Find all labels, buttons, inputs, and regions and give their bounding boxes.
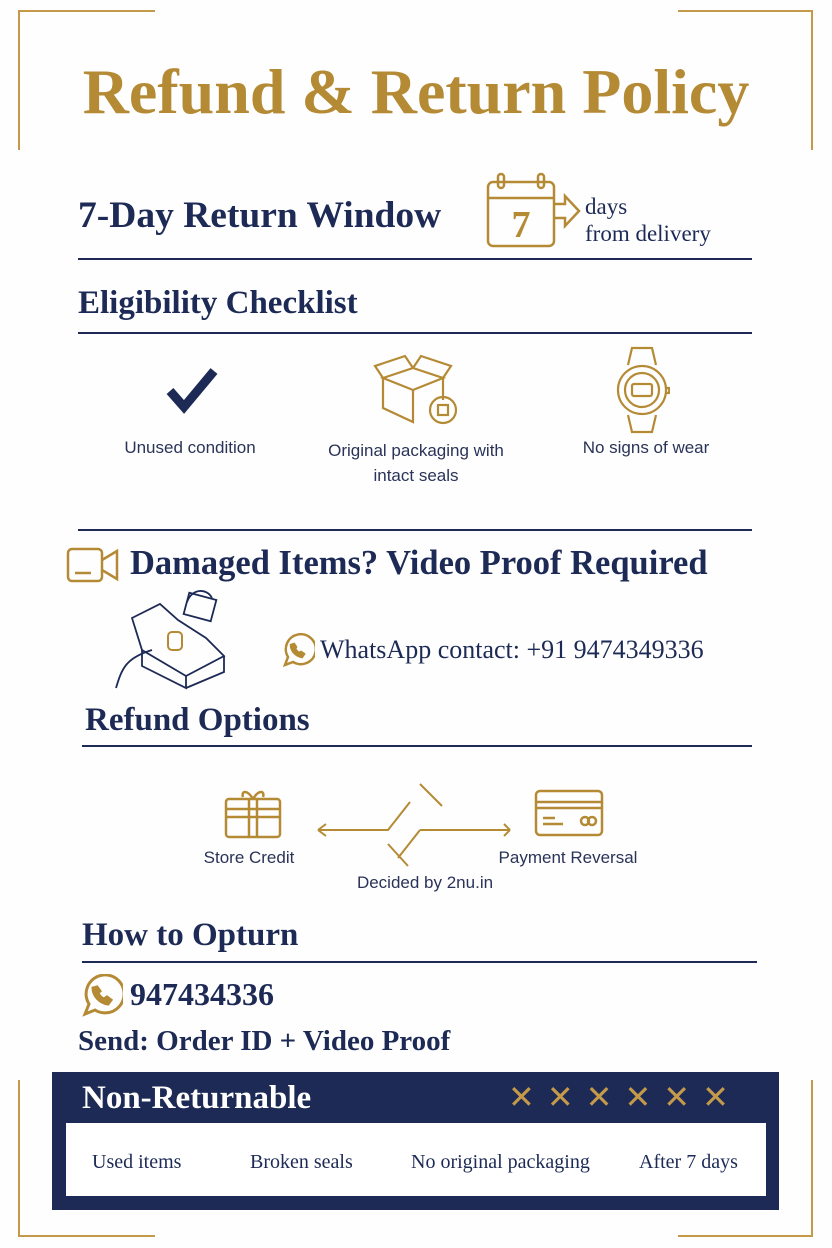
heading: eligibility: Eligibility Checklist (78, 285, 358, 321)
heading: damaged: Damaged Items? Video Proof Required (130, 544, 708, 582)
list box (66, 1123, 766, 1196)
text: send: Send: Order ID + Video Proof (78, 1025, 450, 1057)
icon: video (66, 548, 118, 582)
panel: non-returnable (52, 1072, 779, 1210)
icon: calendar: 7 (512, 204, 530, 246)
text: days from delivery (585, 194, 711, 246)
heading: refund options: Refund Options (85, 702, 310, 738)
list box: Broken seals (250, 1151, 353, 1173)
text: whatsapp contact: WhatsApp contact: +91 9474349336 (320, 635, 704, 664)
label: store credit: Store Credit (204, 848, 294, 867)
icon: calendar (486, 172, 581, 248)
text: phone: 947434336 (130, 976, 274, 1012)
illustration: box with phone (115, 590, 226, 690)
label: packaging (328, 441, 504, 485)
icon: whatsapp large (82, 974, 123, 1017)
label: packaging: Original packaging with (328, 441, 504, 460)
icons: x marks: ✕✕✕✕✕✕ (508, 1078, 741, 1116)
label: no wear: No signs of wear (583, 438, 709, 457)
icon: box (373, 354, 458, 424)
label: payment reversal: Payment Reversal (499, 848, 637, 867)
text: days from delivery: days (585, 194, 627, 219)
title: Refund & Return Policy (83, 56, 749, 127)
icon: whatsapp (282, 633, 315, 668)
heading: 7-day return window: 7-Day Return Window (78, 195, 441, 236)
icon: gift (224, 790, 282, 838)
icon: watch (616, 346, 670, 434)
list box: Used items (92, 1151, 181, 1173)
heading: non-returnable: Non-Returnable (82, 1080, 311, 1116)
label: packaging: intact seals (373, 466, 459, 485)
list box: After 7 days (639, 1151, 738, 1173)
label: decided: Decided by 2nu.in (357, 873, 493, 892)
list box: No original packaging (411, 1151, 590, 1173)
text: days from delivery: from delivery (585, 221, 711, 246)
icon: check (166, 368, 218, 414)
arrows: decision (318, 783, 511, 867)
label: unused: Unused condition (124, 438, 256, 457)
heading: how to: How to Opturn (82, 917, 298, 953)
icon: card (534, 790, 604, 836)
